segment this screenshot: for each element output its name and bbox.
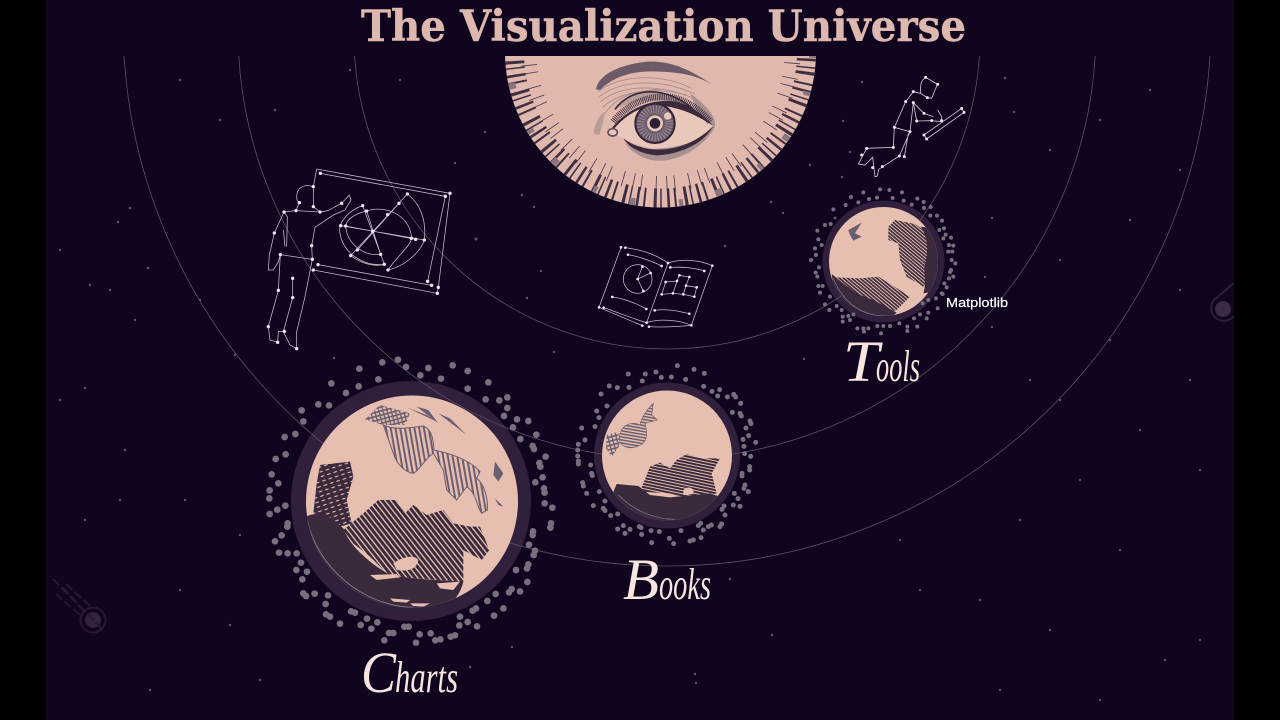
- label: Charts: [361, 640, 458, 705]
- tear duct: [608, 129, 617, 136]
- brow fold hatching: [598, 78, 697, 113]
- eye white: [608, 102, 713, 148]
- books planet halo: [594, 382, 740, 528]
- planet: books: [575, 363, 758, 546]
- planet halos: [291, 200, 944, 621]
- lashes: [613, 97, 710, 122]
- label: Books: B: [623, 547, 659, 612]
- charts craters: [300, 405, 503, 617]
- constellation: open book: [598, 246, 714, 328]
- charts moon dots: [266, 356, 556, 646]
- charts planet face: [306, 396, 518, 608]
- title: The Visualization Universe: [361, 2, 966, 52]
- lid shading: [615, 92, 693, 109]
- label: Books: ooks: [659, 560, 711, 609]
- comet left: [50, 576, 106, 632]
- sun disc: [505, 56, 816, 208]
- constellation: person presenting chart: [267, 169, 452, 350]
- label: Charts: C: [361, 640, 397, 705]
- label: Books: [623, 547, 711, 612]
- constellation: person writing: [858, 76, 965, 177]
- upper lid line: [615, 92, 693, 109]
- books moon dots: [575, 363, 758, 546]
- planet: charts: [266, 356, 556, 646]
- lower lid: [623, 126, 713, 155]
- books craters: [606, 402, 720, 520]
- eyebrow: [596, 61, 714, 90]
- tools planet face: [829, 207, 938, 316]
- label: Tools: [843, 329, 920, 394]
- books planet face: [602, 390, 732, 520]
- label: Tools: ools: [876, 342, 920, 391]
- tools planet halo: [822, 200, 944, 322]
- upper lash band: [612, 101, 713, 132]
- star field: [59, 69, 1201, 701]
- comet right: [1211, 283, 1234, 321]
- charts planet halo: [291, 381, 531, 621]
- iris: [635, 104, 675, 143]
- orbit lines: [123, 0, 1211, 566]
- tools moon dots: [809, 187, 957, 335]
- eye sun: [505, 56, 816, 208]
- right shadow: [625, 93, 715, 161]
- tools craters: [832, 220, 938, 316]
- tooltip: Matplotlib: Matplotlib: [946, 295, 1008, 310]
- planet: tools: [809, 187, 957, 335]
- eye illustration: [593, 61, 715, 161]
- left shadow: [593, 112, 605, 135]
- label: Charts: harts: [395, 653, 458, 702]
- label: Tools: T: [843, 329, 883, 394]
- sun rays: [505, 56, 816, 208]
